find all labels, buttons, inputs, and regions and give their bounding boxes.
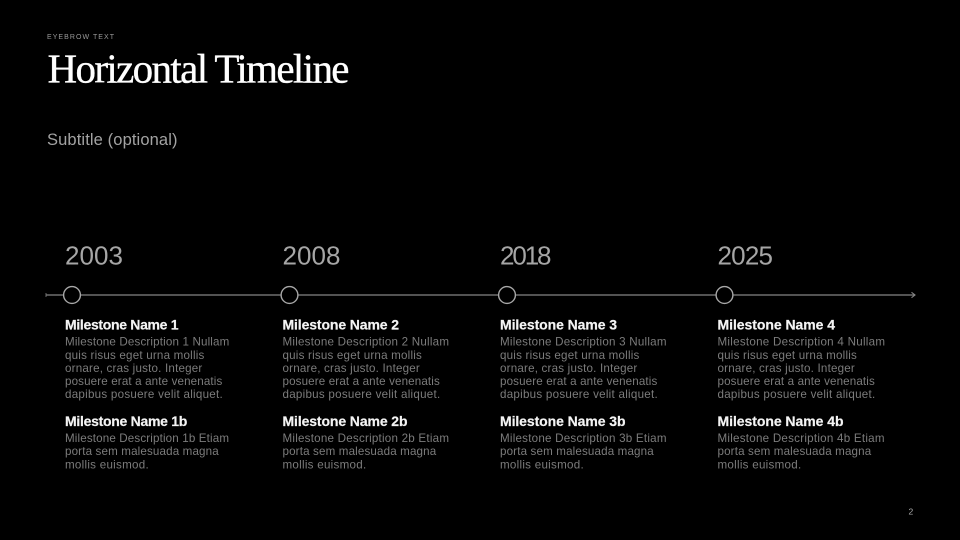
milestone description 2 xyxy=(282,336,449,401)
milestone description 1: dapibus posuere velit aliquet. xyxy=(65,388,223,401)
title: Horizontal Timeline xyxy=(48,46,350,92)
milestone description 2: Milestone Description 2 Nullam xyxy=(282,336,449,349)
milestone column 2003 xyxy=(64,240,229,471)
milestone name 2: Milestone Name 2 xyxy=(282,316,399,332)
marker 2003 xyxy=(64,287,80,303)
milestone description 2b xyxy=(282,432,449,471)
marker 2025 xyxy=(716,287,733,303)
milestone description 3: Milestone Description 3 Nullam xyxy=(500,336,666,349)
milestone name 3b: Milestone Name 3b xyxy=(500,413,626,429)
milestone description 3: ornare, cras justo. Integer xyxy=(500,362,637,375)
milestone description 1b xyxy=(65,432,229,471)
milestone description 2: ornare, cras justo. Integer xyxy=(282,362,420,375)
milestone description 4: dapibus posuere velit aliquet. xyxy=(718,388,875,401)
milestone name 2b: Milestone Name 2b xyxy=(282,413,408,429)
marker 2008 xyxy=(281,287,298,303)
milestone description 2: dapibus posuere velit aliquet. xyxy=(282,388,440,401)
milestone description 4: posuere erat a ante venenatis xyxy=(718,375,875,388)
milestone description 4: Milestone Description 4 Nullam xyxy=(718,336,885,349)
eyebrow: EYEBROW TEXT xyxy=(47,34,115,41)
milestone description 3: posuere erat a ante venenatis xyxy=(500,375,658,388)
milestone description 3b xyxy=(500,432,666,471)
milestone column 2018 xyxy=(499,240,666,471)
milestone description 1: posuere erat a ante venenatis xyxy=(65,375,223,388)
milestone description 4b: mollis euismod. xyxy=(718,458,801,471)
milestone description 1 xyxy=(65,336,229,401)
milestone description 4b: porta sem malesuada magna xyxy=(718,445,872,458)
milestone column 2008 xyxy=(281,240,449,471)
milestone description 3b: mollis euismod. xyxy=(500,458,584,471)
milestone column 2025 xyxy=(716,240,885,471)
milestone description 4: ornare, cras justo. Integer xyxy=(718,362,855,375)
milestone description 3b: Milestone Description 3b Etiam xyxy=(500,432,666,445)
milestone description 3: quis risus eget urna mollis xyxy=(500,349,640,362)
milestone description 4: quis risus eget urna mollis xyxy=(718,349,857,362)
milestone name 3: Milestone Name 3 xyxy=(500,316,617,332)
milestone name 1: Milestone Name 1 xyxy=(65,316,179,332)
milestone description 1: ornare, cras justo. Integer xyxy=(65,362,202,375)
milestone description 3: dapibus posuere velit aliquet. xyxy=(500,388,658,401)
milestone description 3 xyxy=(500,336,666,401)
milestone description 1b: Milestone Description 1b Etiam xyxy=(65,432,229,445)
milestone description 1: Milestone Description 1 Nullam xyxy=(65,336,229,349)
milestone description 4b xyxy=(718,432,884,471)
milestone description 1b: mollis euismod. xyxy=(65,458,149,471)
timeline axis with arrow xyxy=(46,292,915,298)
milestone description 3b: porta sem malesuada magna xyxy=(500,445,654,458)
year 2025: 2025 xyxy=(718,240,773,270)
year 2003: 2003 xyxy=(65,240,123,270)
milestone description 1b: porta sem malesuada magna xyxy=(65,445,219,458)
milestone description 4b: Milestone Description 4b Etiam xyxy=(718,432,884,445)
subtitle: Subtitle (optional) xyxy=(47,131,178,149)
milestone description 4 xyxy=(718,336,885,401)
year 2008: 2008 xyxy=(282,240,340,270)
milestone description 2b: Milestone Description 2b Etiam xyxy=(282,432,449,445)
milestone description 2: posuere erat a ante venenatis xyxy=(282,375,440,388)
milestone name 4: Milestone Name 4 xyxy=(718,316,835,332)
page number: 2 xyxy=(908,506,914,516)
milestone description 2b: mollis euismod. xyxy=(282,458,366,471)
milestone description 1: quis risus eget urna mollis xyxy=(65,349,205,362)
milestone name 1b: Milestone Name 1b xyxy=(65,413,187,429)
milestone description 2b: porta sem malesuada magna xyxy=(282,445,437,458)
marker 2018 xyxy=(499,287,515,303)
milestone description 2: quis risus eget urna mollis xyxy=(282,349,422,362)
year 2018: 2018 xyxy=(500,240,552,270)
milestone name 4b: Milestone Name 4b xyxy=(718,413,844,429)
